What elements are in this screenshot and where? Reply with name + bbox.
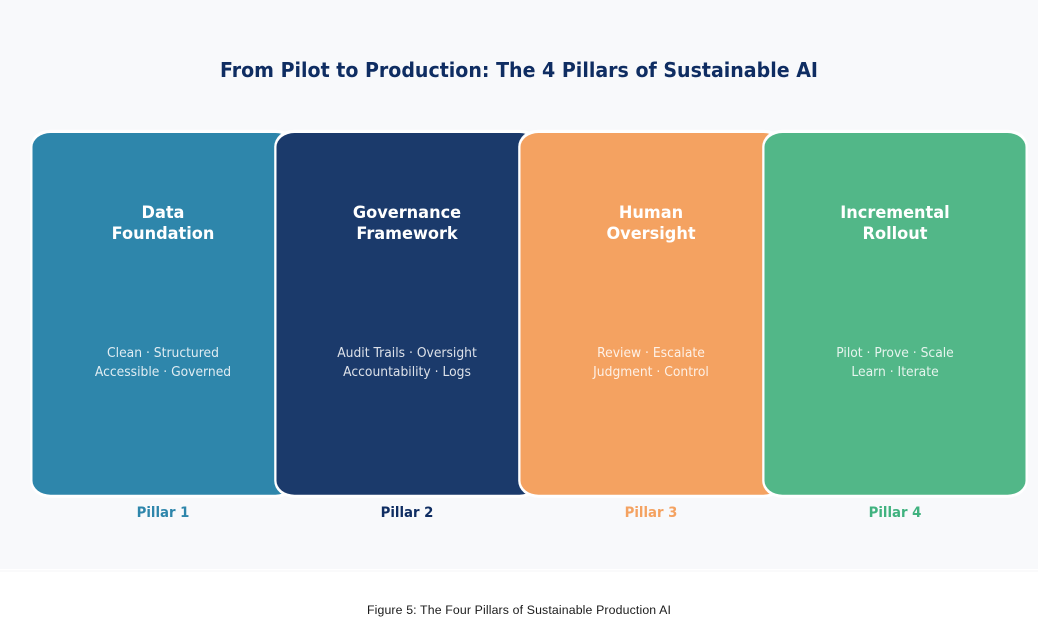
text: Incremental Rollout keywords: Learn · Iterate <box>851 364 939 379</box>
text: Incremental Rollout keywords: Pilot · Prove · Scale <box>836 345 954 360</box>
panel: Data Foundation <box>30 130 296 498</box>
text: Data Foundation keywords: Accessible · Governed <box>95 364 231 379</box>
label: Pillar 3: Pillar 3 <box>625 505 677 521</box>
text: Governance Framework keywords: Audit Trails · Oversight <box>337 345 477 360</box>
heading: Data Foundation: Data <box>142 203 184 222</box>
text: Human Oversight keywords: Review · Escalate <box>597 345 705 360</box>
caption: Figure 5: The Four Pillars of Sustainable Production AI <box>367 603 671 617</box>
text: Governance Framework keywords: Accountability · Logs <box>343 364 471 379</box>
heading: Incremental Rollout: Incremental <box>840 203 950 222</box>
title: From Pilot to Production: The 4 Pillars of Sustainable AI <box>220 59 818 82</box>
panel: Human Oversight <box>518 130 784 498</box>
heading: Governance Framework: Framework <box>356 224 459 243</box>
panel: Incremental Rollout <box>762 130 1028 498</box>
label: Pillar 4: Pillar 4 <box>869 505 921 521</box>
heading: Human Oversight: Human <box>619 203 683 222</box>
heading: Incremental Rollout: Rollout <box>863 224 928 243</box>
heading: Data Foundation: Foundation <box>112 224 214 243</box>
label: Pillar 2: Pillar 2 <box>381 505 433 521</box>
text: Human Oversight keywords: Judgment · Control <box>592 364 709 379</box>
text: Data Foundation keywords: Clean · Structured <box>107 345 219 360</box>
panel: Governance Framework <box>274 130 540 498</box>
heading: Governance Framework: Governance <box>353 203 461 222</box>
heading: Human Oversight: Oversight <box>606 224 696 243</box>
label: Pillar 1: Pillar 1 <box>137 505 189 521</box>
